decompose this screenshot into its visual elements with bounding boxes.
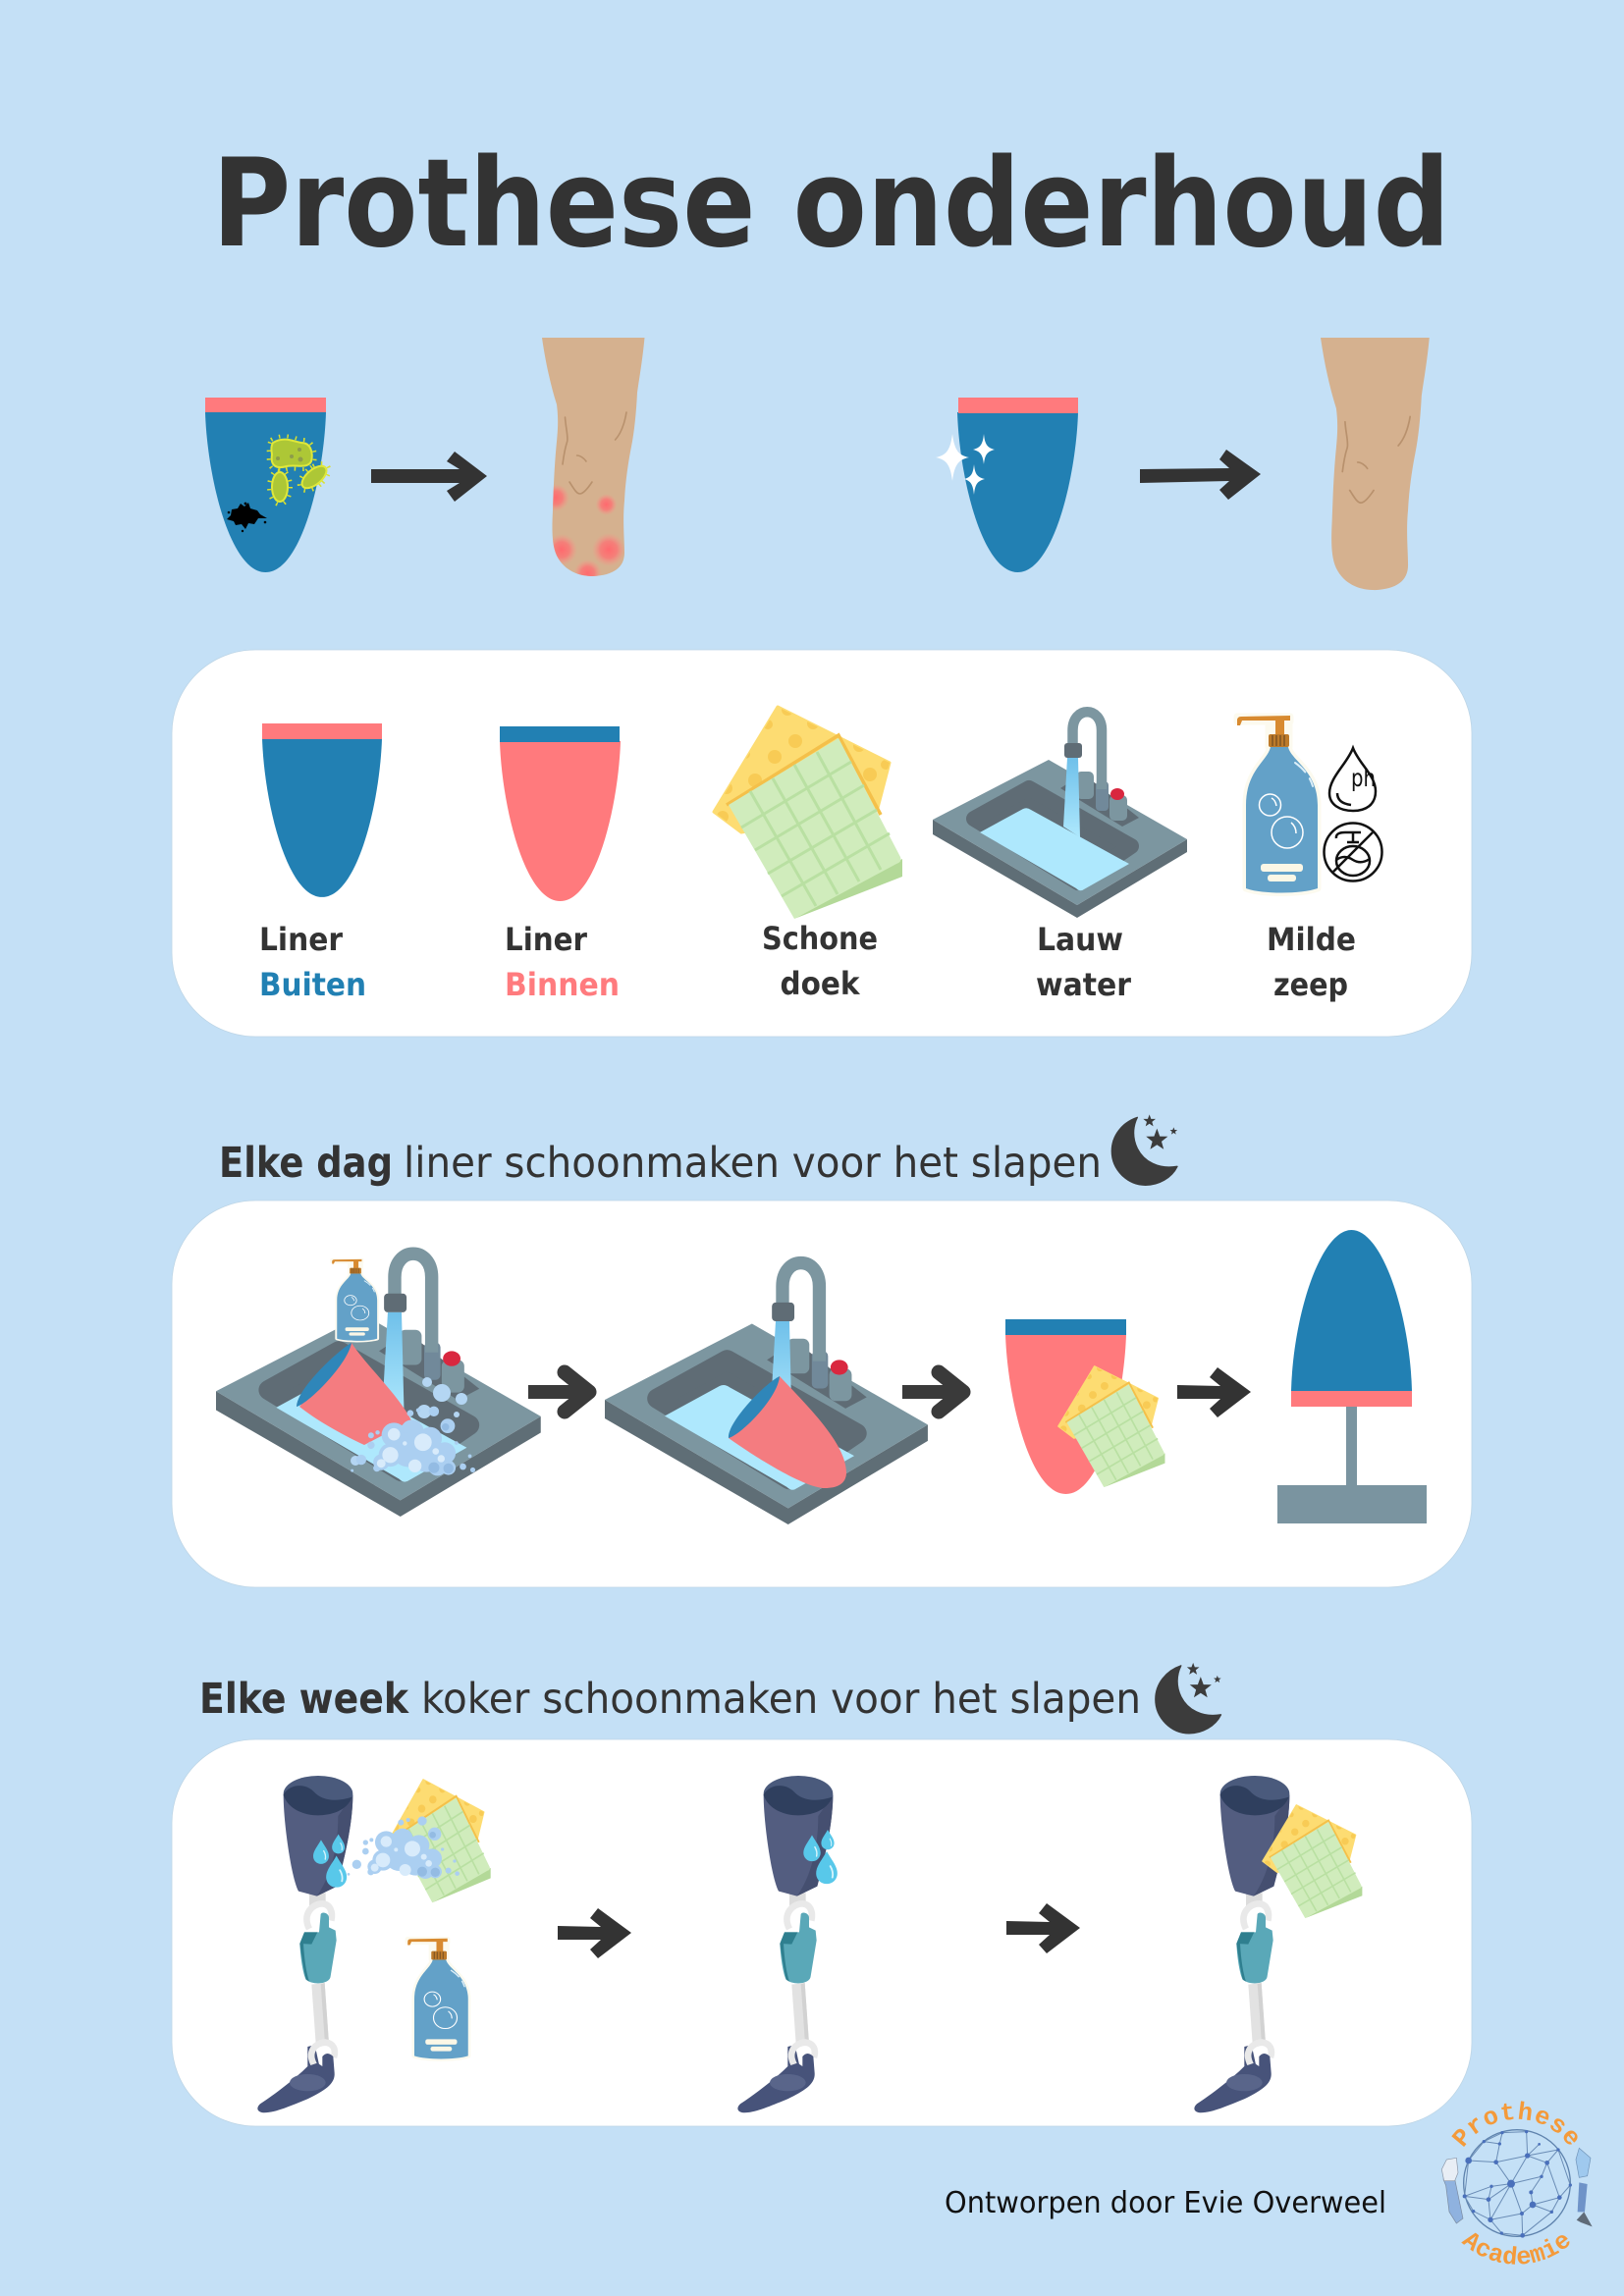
step: rinse socket xyxy=(737,1776,838,2112)
arrow xyxy=(1140,450,1261,500)
arrow xyxy=(902,1372,963,1412)
heading: daily cleaning: Elke dag xyxy=(219,1139,393,1188)
label: liner binnen: Liner xyxy=(505,921,587,958)
label: schone doek xyxy=(762,920,878,1002)
step: wash socket with soap and cloth xyxy=(257,1776,491,2112)
label: liner binnen xyxy=(505,921,620,1003)
icon: irritated residual limb xyxy=(542,338,644,587)
heading: weekly cleaning: koker schoonmaken voor het slapen xyxy=(421,1675,1141,1724)
title: Prothese onderhoud xyxy=(212,133,1450,275)
arrow xyxy=(528,1372,589,1412)
arrow xyxy=(1006,1903,1080,1953)
step: rinse liner under tap xyxy=(605,1263,928,1524)
heading: weekly cleaning: Elke week xyxy=(199,1675,409,1724)
label: lauw water: water xyxy=(1036,966,1131,1003)
label: liner buiten xyxy=(259,921,366,1003)
label: liner buiten: Buiten xyxy=(259,966,366,1003)
panel: daily steps xyxy=(172,1201,1472,1587)
arrow xyxy=(1177,1367,1251,1417)
icon: clean liner with sparkles xyxy=(936,398,1078,572)
label: schone doek: Schone xyxy=(762,920,878,957)
label: milde zeep xyxy=(1267,921,1356,1003)
label: schone doek: doek xyxy=(780,965,860,1002)
icon: healthy residual limb xyxy=(1321,338,1430,590)
panel: supplies xyxy=(172,650,1472,1037)
step: liner on stand xyxy=(1277,1230,1427,1523)
credit: Ontworpen door Evie Overweel xyxy=(945,2186,1386,2220)
step: dry socket with cloth xyxy=(1194,1776,1362,2112)
logo: Prothese Academie: Prothese xyxy=(1451,2101,1578,2147)
step: wash liner with soap in sink xyxy=(216,1254,541,1517)
icon: sink with lukewarm water xyxy=(933,712,1187,918)
icon: liner outside xyxy=(262,723,382,897)
arrow xyxy=(371,452,487,502)
icon: no perfume xyxy=(1324,823,1382,881)
label: lauw water xyxy=(1036,921,1131,1003)
panel: dirty liner leads to irritated skin xyxy=(205,338,644,587)
label: lauw water: Lauw xyxy=(1037,921,1123,958)
logo: Prothese Academie: Academie xyxy=(1461,2232,1569,2265)
label: liner buiten: Liner xyxy=(259,921,343,958)
icon: clean cloth xyxy=(714,704,902,919)
icon: soap bottle xyxy=(1237,716,1318,893)
icon: pH neutral drop: ph xyxy=(1351,764,1376,792)
panel: weekly steps xyxy=(172,1739,1472,2126)
label: milde zeep: Milde xyxy=(1267,921,1356,958)
arrow xyxy=(558,1908,631,1958)
label: milde zeep: zeep xyxy=(1273,966,1348,1003)
step: dry liner with cloth xyxy=(1005,1319,1164,1494)
panel: clean liner leads to healthy skin xyxy=(936,338,1430,590)
icon: moon and stars xyxy=(1156,1663,1221,1734)
icon: dirty liner with bacteria xyxy=(205,398,334,572)
logo: Prothese Academie xyxy=(1441,2101,1593,2265)
icon: liner inside xyxy=(500,726,621,901)
heading: daily cleaning: liner schoonmaken voor het slapen xyxy=(404,1139,1102,1188)
label: liner binnen: Binnen xyxy=(505,966,620,1003)
icon: moon and stars xyxy=(1111,1114,1177,1185)
icon: pH neutral drop xyxy=(1329,748,1376,811)
